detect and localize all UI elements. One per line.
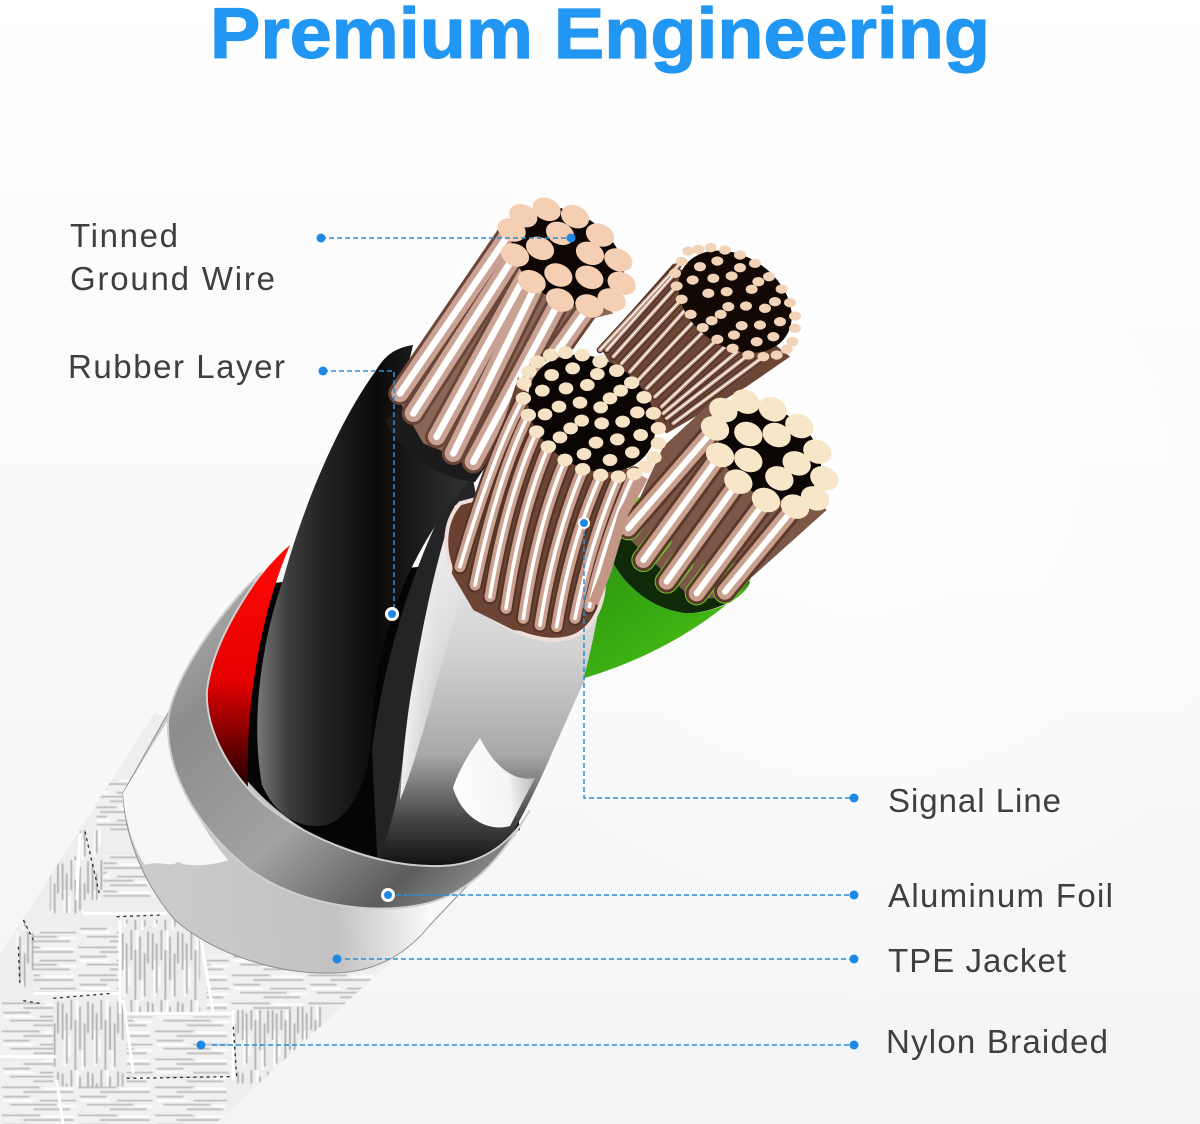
TPE jacket xyxy=(123,633,515,973)
callout: Aluminum Foil: Aluminum Foil xyxy=(888,877,1113,914)
callout: Aluminum Foil xyxy=(382,877,1113,914)
callout: Signal Line xyxy=(579,518,1061,819)
callout: Nylon Braided: Nylon Braided xyxy=(886,1023,1108,1060)
white signal wire xyxy=(378,505,605,872)
callout: Signal Line: Signal Line xyxy=(888,782,1061,819)
cable illustration xyxy=(0,186,843,1124)
aluminum foil ring xyxy=(168,572,530,909)
copper conductors, drawn in 3x zoom coordinates xyxy=(397,186,843,678)
callout: TPE Jacket xyxy=(332,942,1066,979)
callout: Tinned Ground Wire xyxy=(70,217,576,297)
callout: Nylon Braided xyxy=(196,1023,1108,1060)
callout: Tinned Ground Wire: Ground Wire xyxy=(70,260,275,297)
red wire xyxy=(204,545,290,790)
white wire collar xyxy=(446,480,604,640)
rear dark wire xyxy=(372,460,480,872)
bundle: right conductor xyxy=(623,385,843,600)
black rubber wire xyxy=(257,345,490,826)
nylon braided sleeve xyxy=(0,712,395,1124)
red fleck xyxy=(662,440,678,457)
callout: Rubber Layer xyxy=(68,348,398,620)
callout: Rubber Layer: Rubber Layer xyxy=(68,348,285,385)
bundle: central signal conductor xyxy=(452,330,678,637)
green wire xyxy=(583,533,750,678)
callout: Tinned Ground Wire: Tinned xyxy=(70,217,178,254)
black interior xyxy=(207,560,520,866)
bundle: tinned ground wire xyxy=(397,186,643,463)
bundle: rear conductor xyxy=(600,229,811,433)
callout: TPE Jacket: TPE Jacket xyxy=(888,942,1066,979)
